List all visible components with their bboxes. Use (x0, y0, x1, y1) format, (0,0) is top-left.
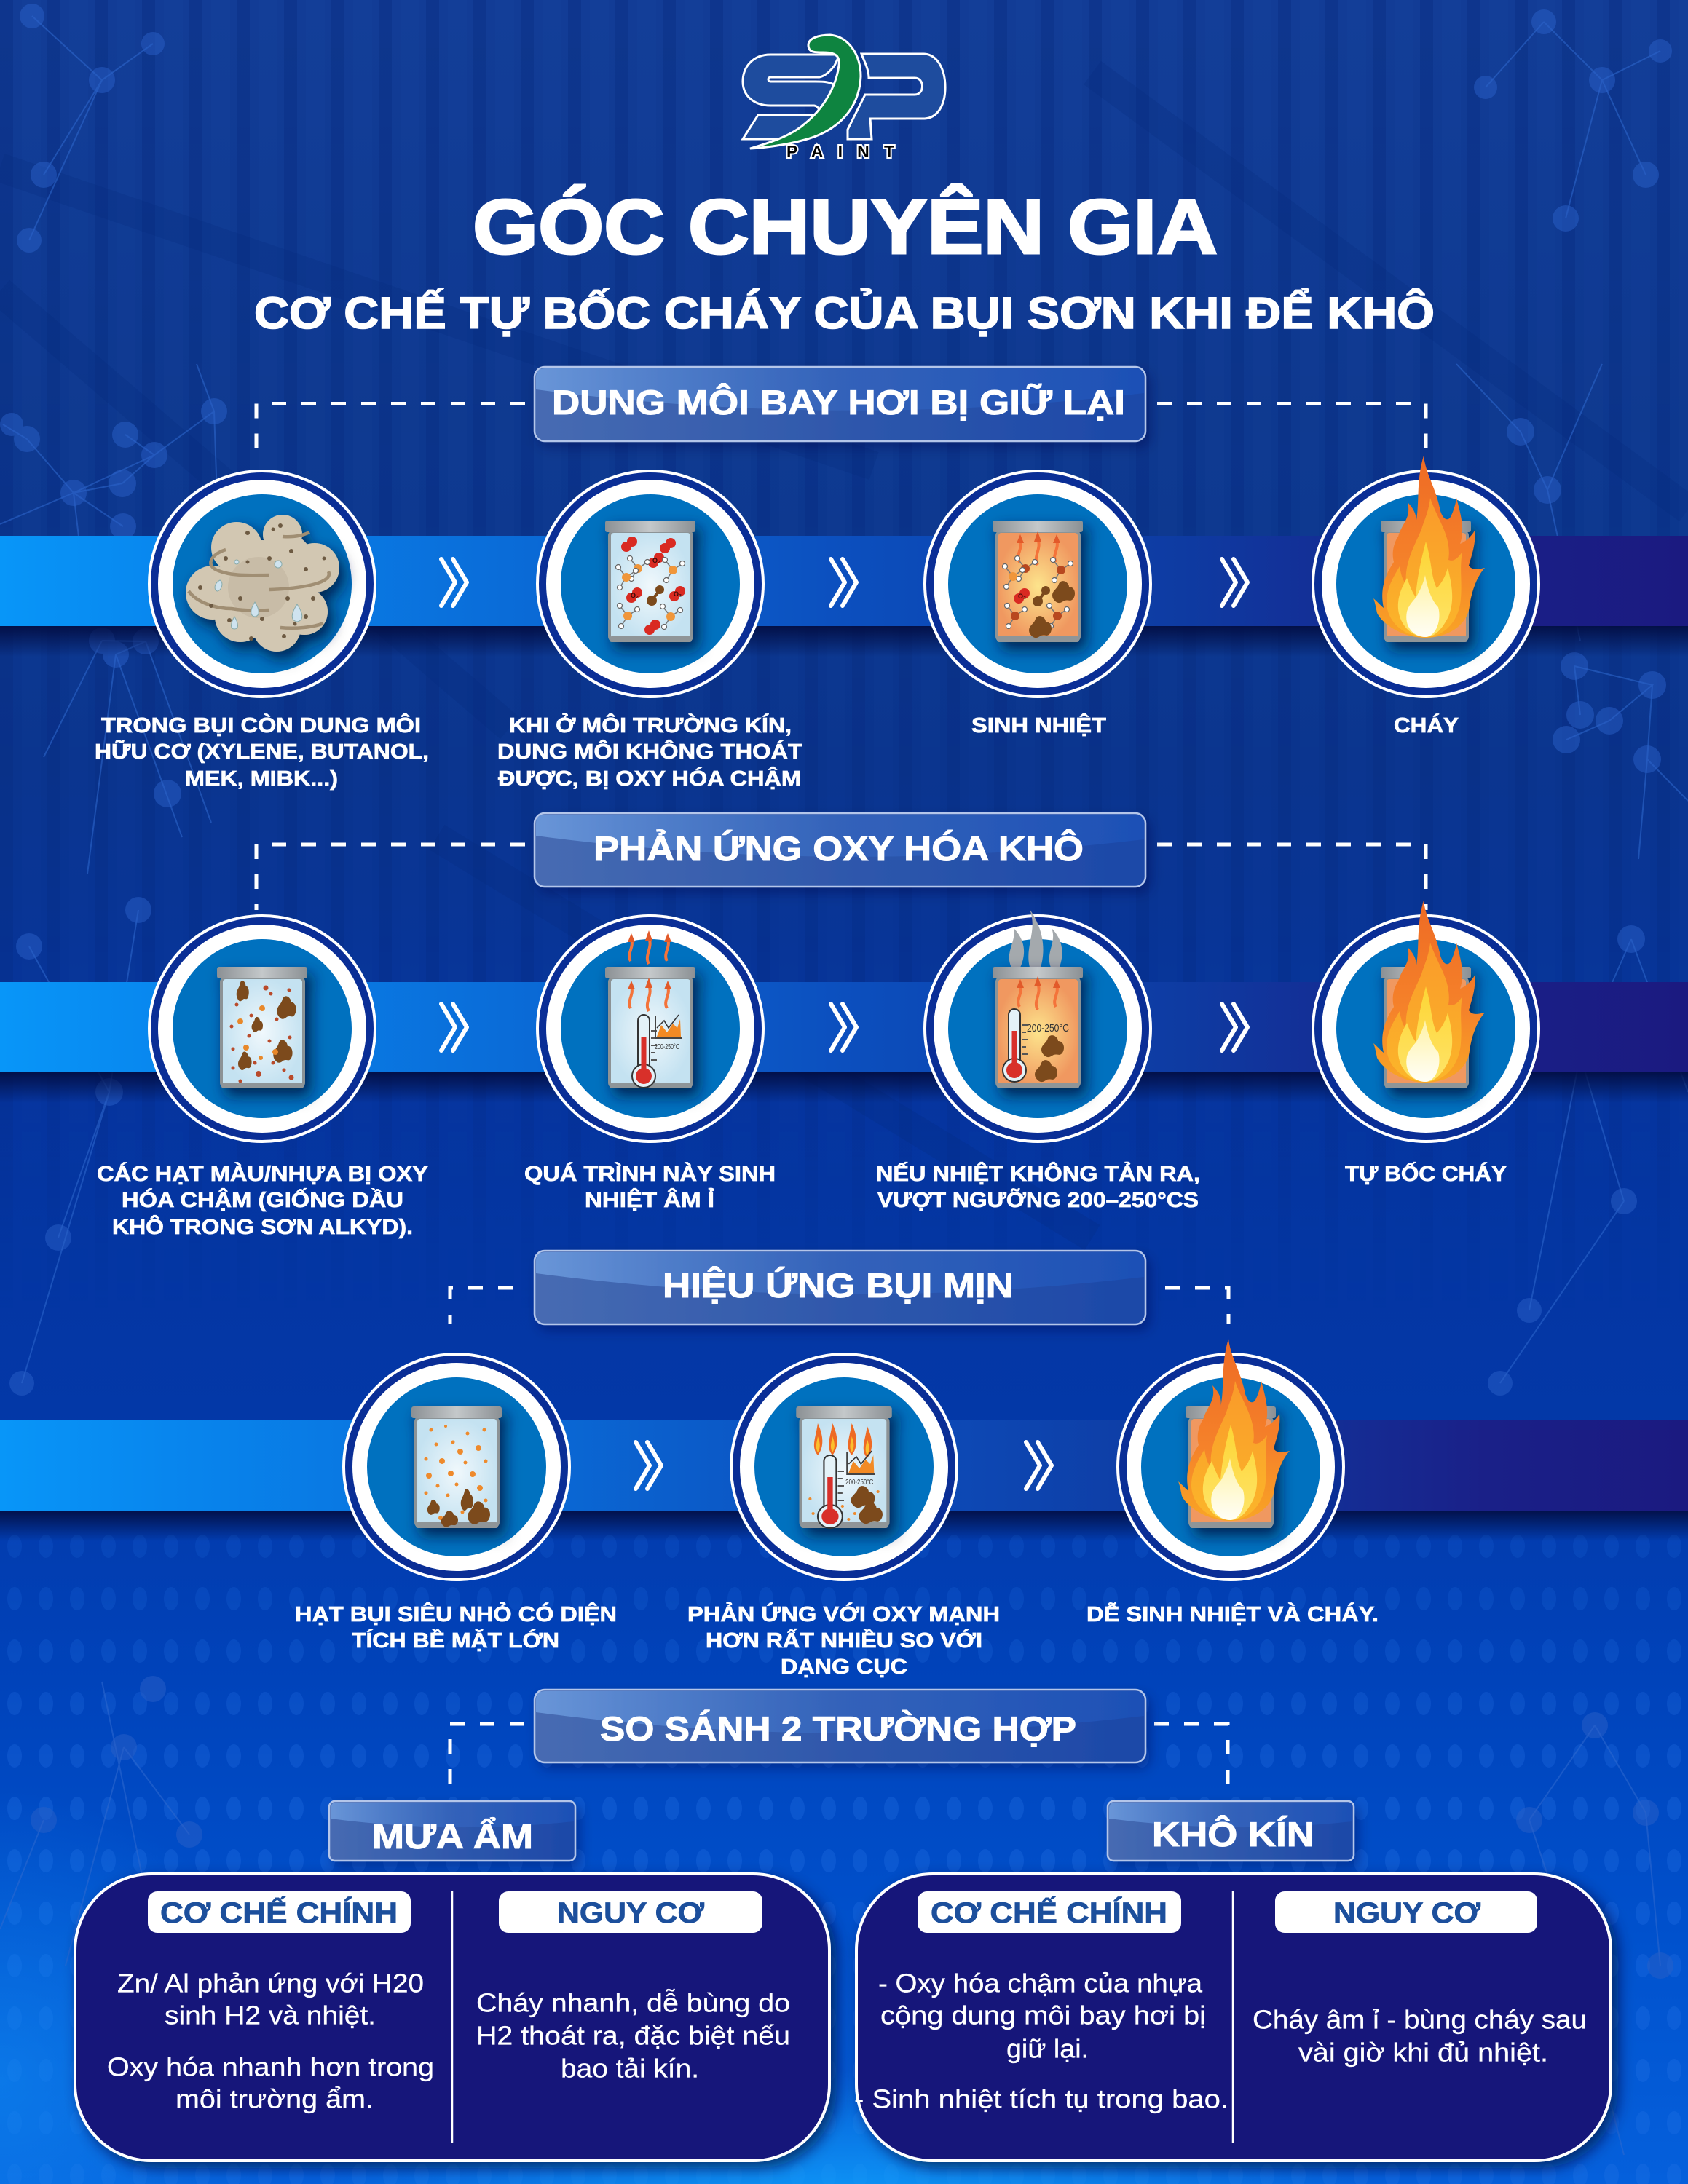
caption: vượt ngưỡng: VƯỢT NGƯỠNG 200–250°CS (877, 1187, 1199, 1212)
logo word PAINT: PAINT (786, 142, 894, 161)
connector dashes row 4 (450, 1724, 1228, 1790)
caption: môi trường kín: KHI Ở MÔI TRƯỜNG KÍN, (509, 713, 792, 737)
text: cơ chế mưa ẩm: môi trường ẩm. (175, 2084, 374, 2114)
band row 3 (0, 1420, 1688, 1541)
section 2: phản ứng oxy hóa khô (0, 813, 1688, 1239)
panel: mưa ẩm (75, 1874, 829, 2161)
text: nguy cơ mưa ẩm: H2 thoát ra, đặc biệt nếu (476, 2021, 790, 2050)
caption: bụi còn dung môi: MEK, MIBK...) (185, 767, 338, 791)
caption: sinh nhiệt âm ỉ (524, 1161, 776, 1212)
text: nguy cơ khô kín: vài giờ khi đủ nhiệt. (1298, 2037, 1548, 2068)
text: cơ chế mưa ẩm: sinh H2 và nhiệt. (165, 2001, 376, 2030)
icon: jar heating: O₂ (1018, 593, 1026, 600)
icon: jar on fire (1313, 456, 1539, 697)
heading: hiệu ứng bụi mịn: HIỆU ỨNG BỤI MỊN (663, 1266, 1014, 1305)
caption: môi trường kín (497, 713, 802, 791)
icon: sealed jar with molecules: O₂ (674, 590, 682, 598)
caption: cháy: CHÁY (1394, 713, 1459, 737)
heading: phản ứng oxy hóa khô (535, 813, 1145, 887)
icon: sealed jar with molecules: O₂ (631, 592, 639, 599)
text: cơ chế khô kín: - Oxy hóa chậm của nhựa (878, 1969, 1203, 1998)
caption: sinh nhiệt: SINH NHIỆT (971, 713, 1106, 737)
icon: jar heating (925, 471, 1151, 697)
caption: oxy hóa chậm: HÓA CHẬM (GIỐNG DẦU (122, 1187, 403, 1212)
pill: nguy cơ (499, 1891, 762, 1933)
caption: môi trường kín: ĐƯỢC, BỊ OXY HÓA CHẬM (498, 766, 801, 791)
caption: hạt bụi siêu nhỏ (295, 1602, 617, 1653)
caption: phản ứng với oxy: PHẢN ỨNG VỚI OXY MẠNH (687, 1602, 1000, 1626)
section 4: so sánh 2 trường hợp (75, 1690, 1611, 2161)
icon: jar overheating with smoke: 200-250°C (1027, 1022, 1069, 1034)
panel: khô kín (854, 1874, 1611, 2161)
text: cơ chế khô kín: cộng dung môi bay hơi bị (880, 2001, 1206, 2030)
section 1: dung môi bay hơi bị giữ lại (0, 367, 1688, 791)
caption: hạt bụi siêu nhỏ: HẠT BỤI SIÊU NHỎ CÓ DIỆN (295, 1602, 617, 1626)
icon: jar with particles (149, 916, 375, 1142)
icon: jar with fine dust (344, 1354, 569, 1580)
caption: bụi còn dung môi (95, 713, 429, 791)
icon: jar overheating with smoke (925, 909, 1151, 1142)
pill: cơ chế chính (148, 1891, 411, 1933)
text: cơ chế khô kín: giữ lại. (1006, 2034, 1089, 2063)
tag: mưa ẩm: MƯA ẨM (372, 1817, 533, 1856)
icon: jar with thermometer (537, 916, 763, 1142)
pill: nguy cơ: NGUY CƠ (557, 1897, 705, 1929)
text: nguy cơ mưa ẩm: Cháy nhanh, dễ bùng do (476, 1987, 790, 2018)
text: cơ chế khô kín: - Sinh nhiệt tích tụ trong bao. (854, 2084, 1228, 2114)
caption: sinh nhiệt âm ỉ: NHIỆT ÂM Ỉ (585, 1187, 714, 1212)
heading: dung môi bay hơi bị giữ lại (535, 367, 1145, 441)
pill: cơ chế chính (918, 1891, 1181, 1933)
caption: bụi còn dung môi: HỮU CƠ (XYLENE, BUTANOL, (95, 739, 429, 764)
tag: khô kín (1108, 1801, 1354, 1861)
caption: sinh nhiệt âm ỉ: QUÁ TRÌNH NÀY SINH (524, 1161, 776, 1186)
caption: phản ứng với oxy: DẠNG CỤC (781, 1655, 907, 1679)
heading: so sánh 2 trường hợp: SO SÁNH 2 TRƯỜNG HỢP (600, 1709, 1076, 1748)
connector dashes row 2 (256, 844, 1426, 910)
title: GÓC CHUYÊN GIA (473, 184, 1218, 270)
caption: môi trường kín: DUNG MÔI KHÔNG THOÁT (497, 739, 802, 764)
text: cơ chế khô kín (854, 1969, 1228, 2114)
caption: vượt ngưỡng: NẾU NHIỆT KHÔNG TẢN RA, (876, 1161, 1200, 1186)
heading: hiệu ứng bụi mịn (535, 1251, 1145, 1324)
icon: jar reacts with oxygen: 200-250°C (845, 1479, 874, 1487)
caption: bụi còn dung môi: TRONG BỤI CÒN DUNG MÔI (101, 713, 421, 737)
text: nguy cơ mưa ẩm (476, 1987, 790, 2084)
arrows row 3 (636, 1442, 1052, 1489)
caption: phản ứng với oxy (687, 1602, 1000, 1679)
tag: mưa ẩm (329, 1801, 575, 1861)
caption: dễ sinh nhiệt và cháy: DỄ SINH NHIỆT VÀ CHÁY. (1086, 1602, 1379, 1626)
caption: oxy hóa chậm: KHÔ TRONG SƠN ALKYD). (112, 1214, 413, 1239)
connector dashes row 3 (450, 1288, 1228, 1324)
icon: dust cloud (149, 471, 375, 697)
subtitle: CƠ CHẾ TỰ BỐC CHÁY CỦA BỤI SƠN KHI ĐỂ KHÔ (254, 288, 1435, 338)
caption: oxy hóa chậm (97, 1161, 428, 1239)
caption: tự bốc cháy: TỰ BỐC CHÁY (1345, 1161, 1507, 1186)
arrows row 2 (441, 1004, 1247, 1051)
pill: cơ chế chính: CƠ CHẾ CHÍNH (931, 1896, 1167, 1929)
caption: phản ứng với oxy: HƠN RẤT NHIỀU SO VỚI (706, 1628, 982, 1653)
caption: oxy hóa chậm: CÁC HẠT MÀU/NHỰA BỊ OXY (97, 1161, 428, 1186)
logo letter P (848, 54, 945, 139)
arrows row 1 (441, 559, 1247, 606)
icon: sealed jar with molecules (537, 471, 763, 697)
icon: jar reacts with oxygen (731, 1354, 957, 1580)
logo letter S (743, 55, 840, 139)
band row 2 (0, 982, 1688, 1103)
caption: vượt ngưỡng (876, 1161, 1200, 1212)
text: cơ chế mưa ẩm (107, 1969, 434, 2114)
pill: cơ chế chính: CƠ CHẾ CHÍNH (160, 1896, 398, 1929)
text: nguy cơ mưa ẩm: bao tải kín. (561, 2053, 699, 2084)
band row 1 (0, 536, 1688, 657)
pill: nguy cơ: NGUY CƠ (1333, 1897, 1481, 1929)
icon: jar with thermometer: 200-250°C (655, 1043, 679, 1051)
icon: sealed jar with molecules: O₂ (652, 557, 660, 564)
logo green swoosh (750, 35, 861, 149)
logo: SP Paint (743, 35, 945, 161)
text: cơ chế mưa ẩm: Zn/ Al phản ứng với H20 (117, 1969, 424, 1998)
connector dashes row 1 (256, 403, 1426, 460)
text: nguy cơ khô kín (1253, 2005, 1587, 2068)
tag: khô kín: KHÔ KÍN (1152, 1815, 1314, 1853)
icon: jar burning (1118, 1339, 1344, 1580)
section 3: hiệu ứng bụi mịn (0, 1251, 1688, 1679)
heading: dung môi bay hơi bị giữ lại: DUNG MÔI BAY HƠI BỊ GIỮ LẠI (552, 383, 1125, 422)
heading: so sánh 2 trường hợp (535, 1690, 1145, 1762)
caption: hạt bụi siêu nhỏ: TÍCH BỀ MẶT LỚN (352, 1628, 559, 1653)
heading: phản ứng oxy hóa khô: PHẢN ỨNG OXY HÓA KHÔ (593, 829, 1084, 868)
text: cơ chế mưa ẩm: Oxy hóa nhanh hơn trong (107, 2052, 434, 2082)
text: nguy cơ khô kín: Cháy âm ỉ - bùng cháy sau (1253, 2005, 1587, 2034)
pill: nguy cơ (1275, 1891, 1537, 1933)
icon: jar self ignites (1313, 901, 1539, 1142)
